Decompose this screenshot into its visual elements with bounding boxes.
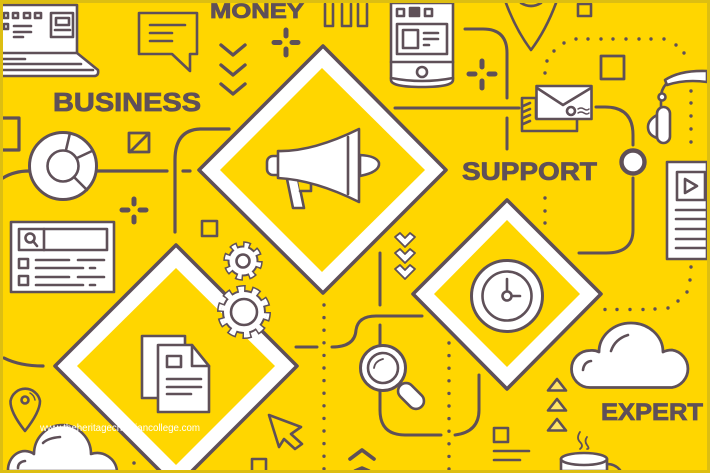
icon: clock (472, 260, 542, 332)
connector: envelope to node (579, 107, 633, 253)
heading: SUPPORT: SUPPORT (462, 158, 597, 186)
decorative square (601, 56, 624, 79)
icon: triple chevrons down (221, 45, 245, 94)
heading: BUSINESS: BUSINESS (53, 87, 201, 117)
icon: headphones (648, 71, 707, 143)
watermark: www.theheritagechristiancollege.com (39, 423, 200, 434)
icon: pie chart ring (30, 132, 96, 200)
decorative crossed square (129, 133, 149, 152)
dotted path: top right (545, 39, 684, 73)
icon: magnifying glass (360, 346, 427, 412)
icon: triangles (548, 379, 566, 430)
heading: EXPERT: EXPERT (601, 399, 703, 426)
icon: sparkle right (469, 61, 495, 88)
decorative square top right (578, 4, 591, 16)
icon: bars (325, 4, 367, 26)
decorative square small (202, 221, 217, 236)
icon: chevrons white (395, 233, 415, 279)
icon: speech bubble (139, 13, 197, 71)
dotted line: headphones (689, 91, 693, 142)
decorative bracket left (3, 118, 19, 150)
icon: chevron up bottom (350, 450, 374, 471)
connector: curve to diamond (175, 129, 229, 232)
icon: form lines bottom (494, 428, 529, 460)
icon: cloud lower left (8, 425, 117, 471)
dotted line: center (322, 305, 326, 472)
icon: small dot (132, 461, 136, 465)
icon: documents (142, 336, 209, 412)
icon: map pin (10, 389, 40, 431)
dotted path: right bottom (605, 267, 691, 310)
icon: megaphone (267, 129, 379, 208)
diamond panel: megaphone (199, 46, 446, 293)
connector: top right curve (395, 29, 519, 149)
connector: lower left curve (4, 358, 43, 366)
icon: coffee cup (561, 432, 620, 471)
heading: MONEY: MONEY (210, 0, 304, 23)
icon: map pin top (506, 3, 556, 50)
connector: magnifier lines (296, 253, 479, 435)
dotted line: right center (447, 343, 451, 472)
icon: ring node (622, 150, 644, 174)
icon: laptop (3, 5, 98, 76)
icon: sparkle left (122, 199, 146, 222)
icon: search form (11, 222, 114, 292)
icon: cloud right (572, 323, 688, 388)
decorative square bottom (252, 459, 266, 470)
diamond panel: clock (413, 200, 601, 389)
icon: sparkle top (274, 30, 298, 55)
icon: cursor arrow (269, 415, 302, 449)
dotted line: left of clock diamond top (543, 198, 547, 223)
icon: video document (667, 162, 707, 259)
diamond panel: documents (55, 245, 297, 473)
icon: smartphone (391, 3, 453, 87)
connector: pie chart line (3, 171, 190, 178)
icon: envelope (522, 86, 592, 131)
icon: gears (220, 244, 268, 336)
